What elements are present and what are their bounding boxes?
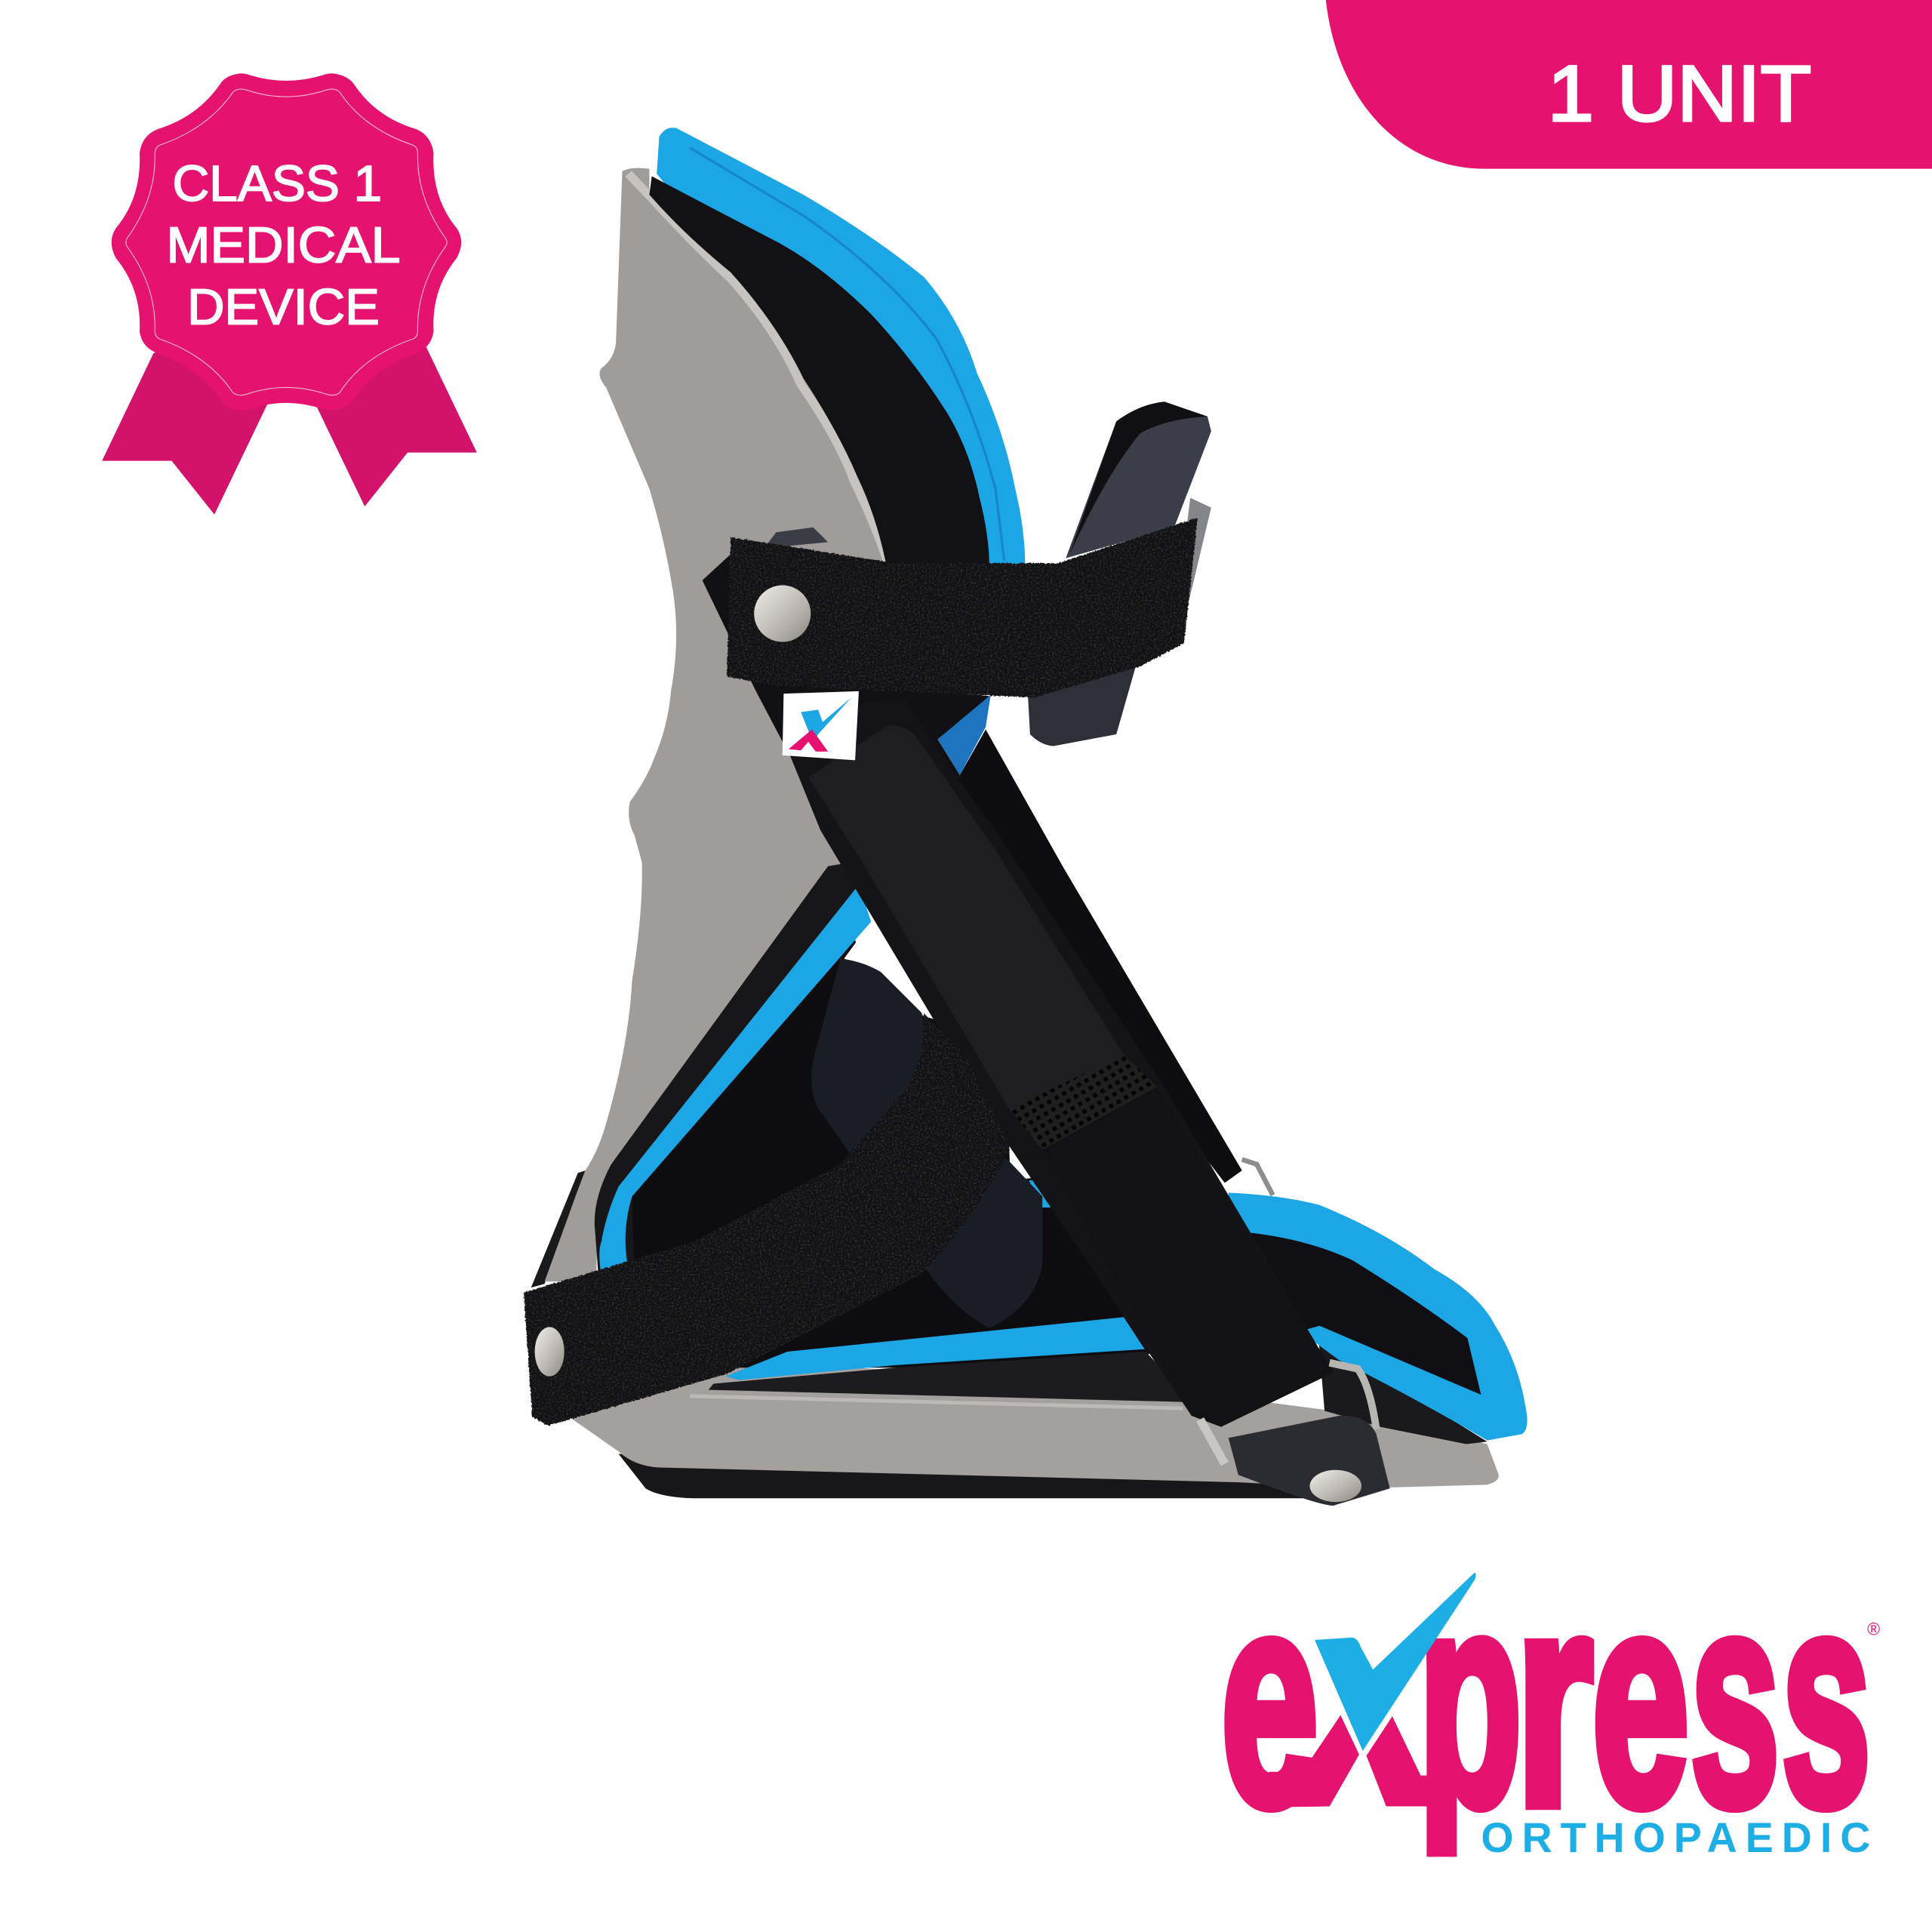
sole underside	[619, 1454, 1355, 1498]
wordmark letters: r	[1515, 1531, 1593, 1868]
ankle strap	[727, 518, 1198, 697]
wordmark letters: e	[1592, 1531, 1689, 1869]
foot pad blue binding	[1229, 1192, 1527, 1441]
top tab behind strap	[764, 528, 828, 549]
wordmark letters: s	[1690, 1531, 1780, 1868]
badge text: CLASS 1	[173, 155, 382, 212]
banner: 1 unit	[1326, 0, 1932, 169]
badge: class 1 medical device	[102, 73, 477, 515]
lower rear black edge	[595, 863, 865, 1281]
banner: 1 unit: 1 UNIT	[1548, 50, 1811, 138]
rear strap	[949, 730, 1242, 1183]
sole blue stripe	[726, 1317, 1145, 1380]
logo x lower legs	[1269, 1715, 1426, 1807]
product: orthopaedic night splint	[524, 128, 1527, 1506]
left ring	[1200, 1420, 1225, 1464]
ankle pad	[811, 958, 1042, 1328]
wordmark letters: e	[1221, 1531, 1318, 1869]
black webbing under tag	[703, 552, 991, 830]
sole plate	[569, 1355, 1499, 1488]
gray shell	[545, 168, 890, 1281]
dark blue stripe	[937, 695, 991, 775]
strap base	[791, 700, 1334, 1427]
heel back sliver	[531, 1171, 586, 1287]
sole plate highlight	[690, 1396, 1183, 1408]
badge text: MEDICAL	[166, 217, 401, 274]
lower flap tab	[1028, 666, 1136, 746]
blue sliver at instep	[1029, 1180, 1055, 1208]
brand tag	[783, 691, 859, 760]
strap lower section	[1042, 1087, 1334, 1427]
logo x lower legs: x	[1309, 1527, 1440, 1872]
right ring	[1330, 1363, 1377, 1429]
registered mark: ®	[1867, 1620, 1880, 1639]
plastic strap end	[1173, 498, 1211, 641]
logo: express orthopaedic	[1224, 1573, 1880, 1857]
white gap under strap	[844, 921, 949, 1023]
orthopaedic text: ORTHOPAEDIC	[1481, 1814, 1870, 1861]
upper snap	[754, 586, 811, 642]
leather tab	[1229, 1416, 1390, 1506]
lower rear blue stripe	[599, 884, 871, 1276]
lower snap	[535, 1327, 565, 1377]
wordmark letters	[1224, 1635, 1867, 1857]
foot edge mesh	[1318, 1337, 1487, 1444]
main velcro strap	[791, 700, 1334, 1427]
shell edge highlight	[629, 174, 888, 561]
upper blue pad fold	[690, 148, 1004, 561]
sole mesh	[709, 1352, 1192, 1402]
back flap	[1066, 401, 1211, 558]
foot pad black lining	[1244, 1232, 1481, 1395]
upper blue pad	[657, 128, 1025, 579]
rear interior	[616, 924, 1281, 1367]
badge text: DEVICE	[187, 278, 380, 335]
buckle assembly	[1200, 1363, 1390, 1506]
upper black pad	[649, 176, 989, 569]
back flap shadow	[1069, 401, 1208, 555]
buckle snap	[1310, 1470, 1361, 1502]
logo check mark	[1315, 1573, 1476, 1751]
wordmark letters: p	[1418, 1531, 1522, 1870]
badge seal	[112, 73, 461, 411]
heel strap	[524, 1013, 1009, 1426]
wordmark letters: s	[1782, 1531, 1871, 1868]
badge text	[166, 155, 401, 335]
strap velcro patch	[808, 724, 1124, 1109]
badge ribbons	[102, 308, 477, 515]
tag check mark	[801, 697, 851, 743]
tag x	[789, 730, 828, 752]
rear d-ring	[1242, 1159, 1273, 1195]
strap perforation	[1009, 1055, 1157, 1149]
badge inner outline	[126, 89, 447, 395]
